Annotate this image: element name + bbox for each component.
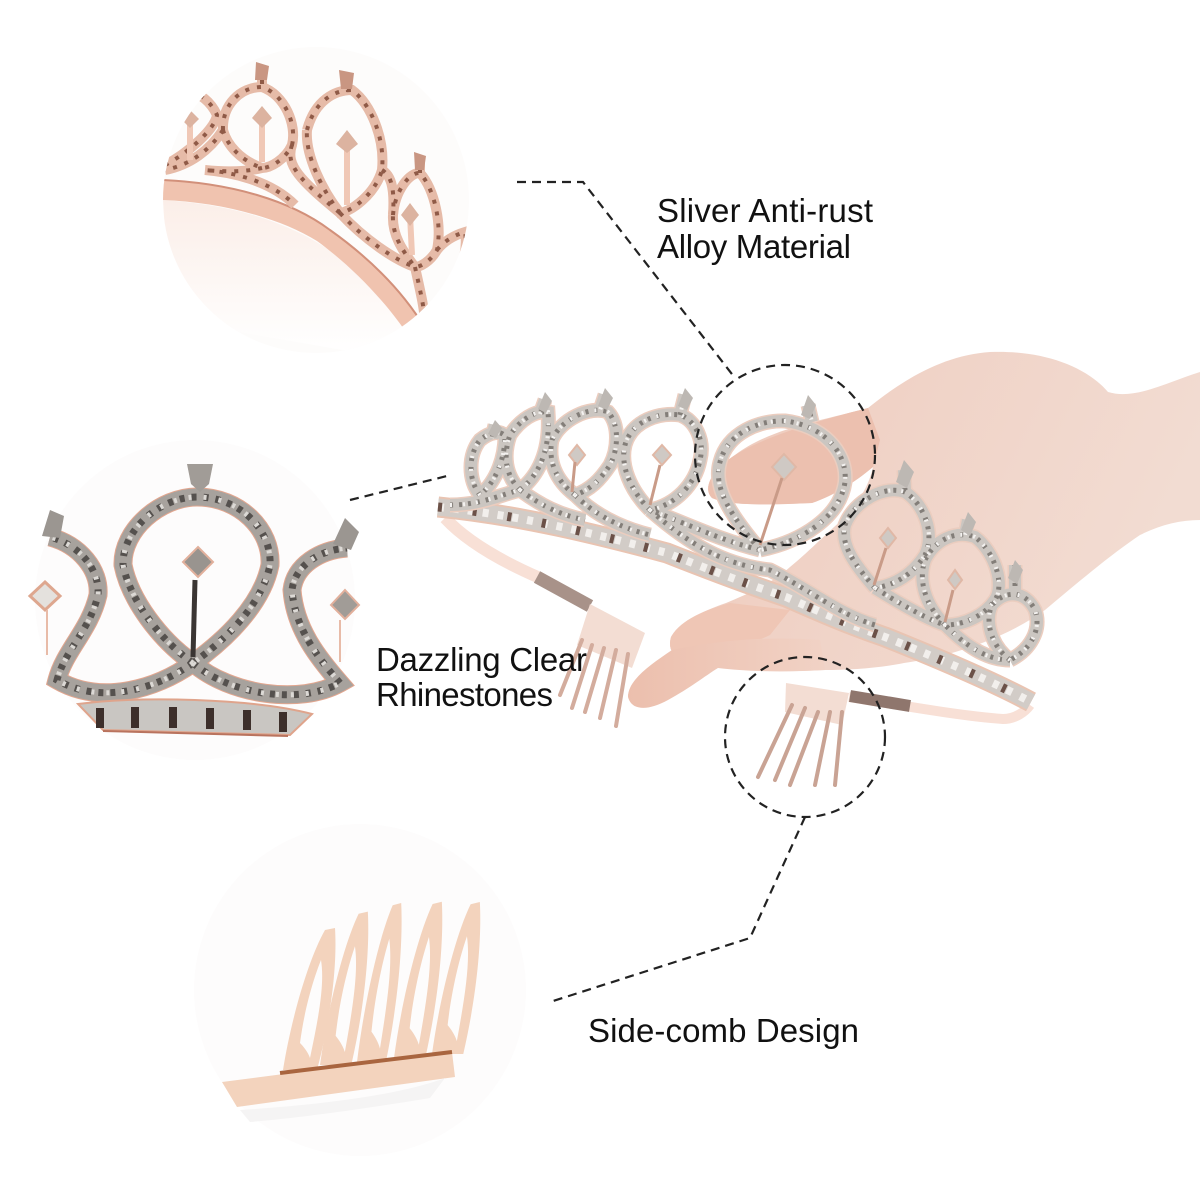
comb left <box>560 604 645 726</box>
label: alloy material <box>657 192 873 265</box>
band left <box>445 518 588 605</box>
leader: comb <box>550 817 805 1002</box>
band right <box>849 697 1030 719</box>
dashed circle: loop <box>695 365 875 545</box>
comb close-up <box>222 902 480 1107</box>
label: alloy material: Alloy Material <box>657 228 851 265</box>
panel: rhinestones close-up <box>30 440 359 760</box>
stones <box>438 388 1037 702</box>
label: rhinestones <box>376 641 587 713</box>
dashed circle: comb <box>725 657 885 817</box>
label: rhinestones: Rhinestones <box>376 676 553 713</box>
crown close-up stones <box>30 464 359 736</box>
callout lines and dashed circles <box>350 182 885 1002</box>
label: alloy material: Sliver Anti-rust <box>657 192 873 229</box>
comb right <box>758 683 849 785</box>
label: rhinestones: Dazzling Clear <box>376 641 587 678</box>
tiara <box>438 388 1037 785</box>
leader: rhinestones <box>350 476 447 500</box>
panel: alloy material close-up <box>163 62 467 326</box>
panel: side-comb close-up <box>194 824 526 1156</box>
hand <box>628 352 1200 708</box>
leader: alloy <box>517 182 735 378</box>
label: side-comb: Side-comb Design <box>588 1012 859 1049</box>
crown close-up <box>163 62 466 353</box>
